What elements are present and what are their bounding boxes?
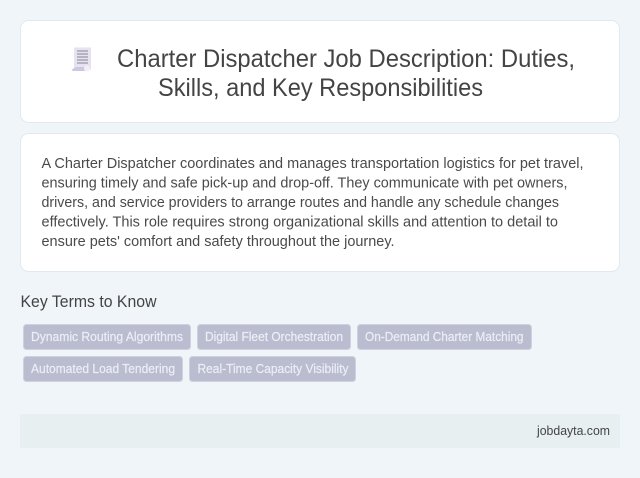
text block: description [42,156,584,250]
text block: description: A Charter Dispatcher coordinates and manages transportation logistics for pet travel, [42,156,584,172]
heading: key terms: Key Terms to Know [20,293,157,311]
title: Charter Dispatcher Job Description: Duties, [117,45,575,73]
panel: description card [20,134,620,272]
tag: real-time capacity visibility: Real-Time Capacity Visibility [198,362,349,376]
tag: digital fleet orchestration [198,324,350,350]
tag: digital fleet orchestration: Digital Fleet Orchestration [205,330,343,344]
text block: description: drivers, and service providers to arrange routes and handle any schedule changes [42,195,559,211]
footer bar [20,414,620,448]
tag: dynamic routing algorithms [24,324,190,350]
text block: description: ensure pets' comfort and safety throughout the journey. [42,234,394,250]
icon: document scroll [72,48,91,72]
text block: description: effectively. This role requires strong organizational skills and attention to detail to [42,214,558,230]
title: Skills, and Key Responsibilities [158,74,483,102]
tag: dynamic routing algorithms: Dynamic Routing Algorithms [31,330,183,344]
tag: on-demand charter matching [358,324,532,350]
tag: automated load tendering: Automated Load Tendering [31,362,175,376]
text block: description: ensuring timely and safe pick-up and drop-off. They communicate with pet owners, [42,176,568,192]
tag: on-demand charter matching: On-Demand Charter Matching [365,330,524,344]
tag: automated load tendering [24,356,182,382]
footer source: jobdayta.com [536,424,610,438]
panel: title card [20,20,620,122]
tag: real-time capacity visibility [190,356,356,382]
title [117,45,575,102]
